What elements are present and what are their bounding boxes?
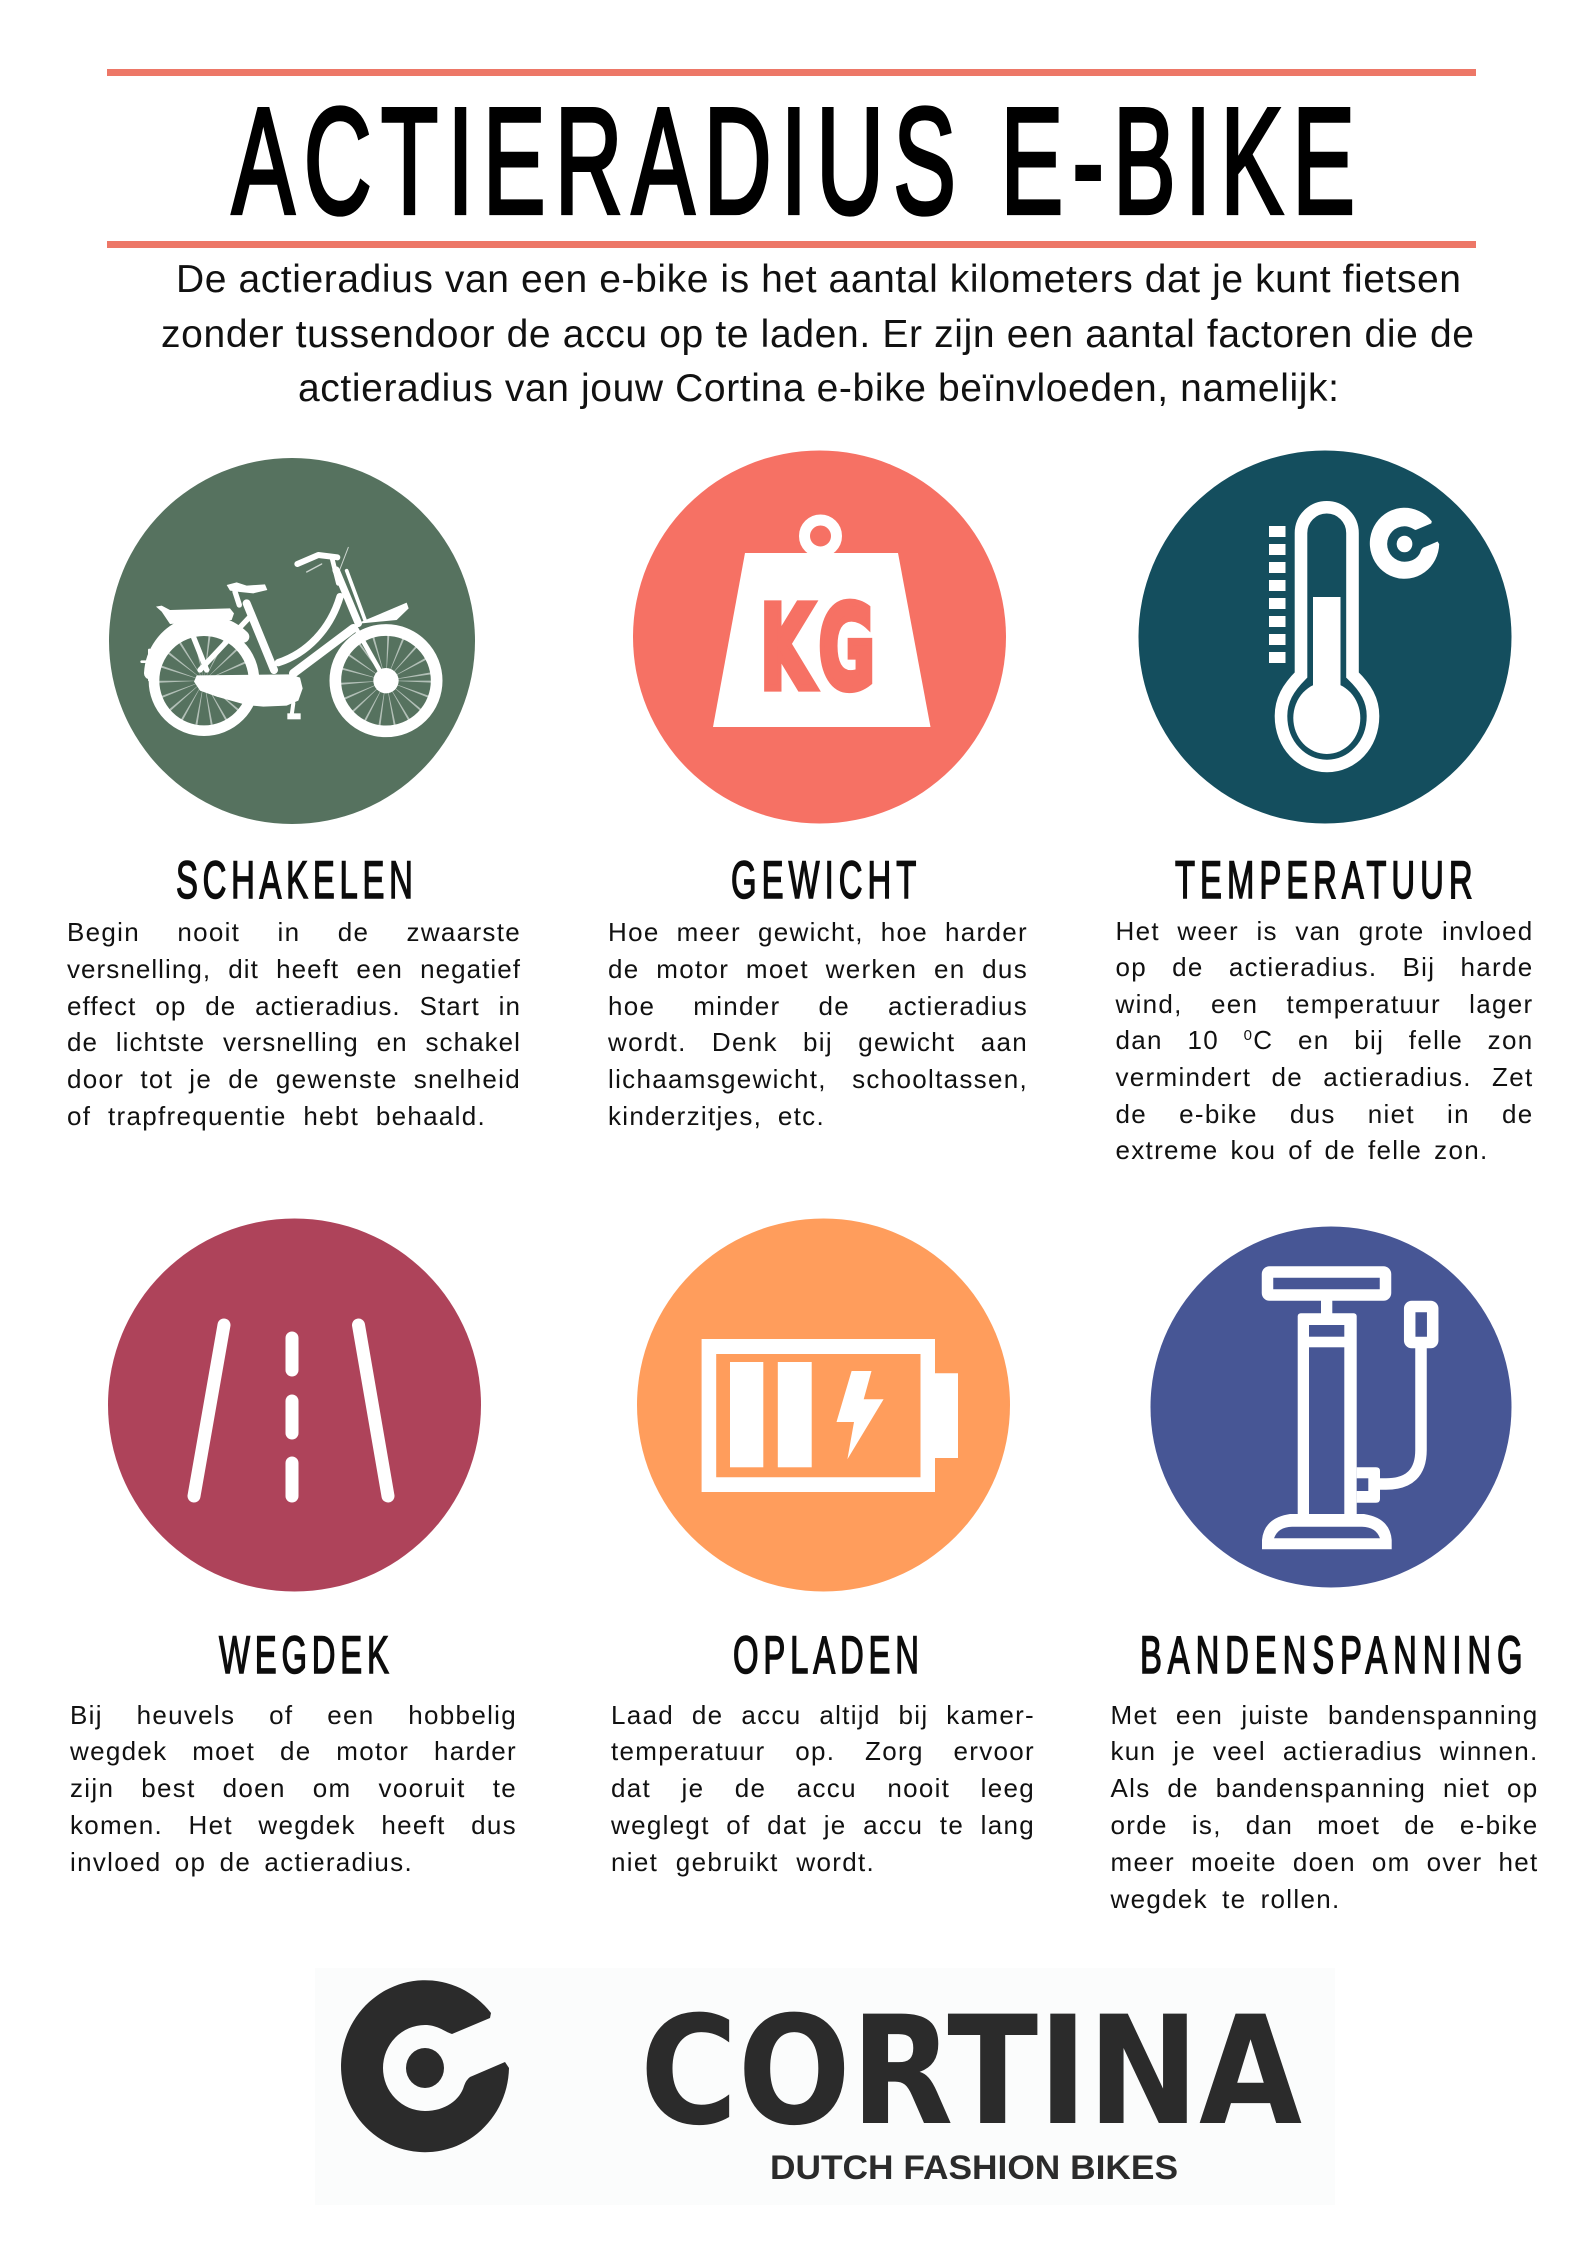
text: temperatuur: op de actieradius. Bij harde	[1116, 952, 1534, 982]
text: gewicht: kinderzitjes, etc.	[608, 1101, 825, 1131]
text: temperatuur: dan 10 0C en bij felle zon	[1116, 1025, 1534, 1055]
text: gewicht: Hoe meer gewicht, hoe harder	[608, 917, 1028, 947]
text: temperatuur: Het weer is van grote invloed	[1116, 916, 1534, 946]
title: ACTIERADIUS E-BIKE	[232, 76, 1355, 245]
text: bandenspanning: orde is, dan moet de e-bike	[1110, 1810, 1538, 1840]
heading: bandenspanning: BANDENSPANNING	[1140, 1626, 1523, 1685]
intro text: actieradius van jouw Cortina e-bike beïnvloeden, namelijk:	[298, 367, 1339, 410]
icon: road	[108, 1218, 481, 1592]
heading: temperatuur: TEMPERATUUR	[1175, 851, 1473, 910]
text: gewicht	[608, 917, 1028, 1131]
text: wegdek: zijn best doen om vooruit te	[70, 1773, 517, 1803]
text: schakelen: of trapfrequentie hebt behaald.	[67, 1101, 486, 1131]
panel: opladen	[611, 1218, 1035, 1877]
text: wegdek: Bij heuvels of een hobbelig	[70, 1700, 517, 1730]
icon: Cortina mark	[341, 1980, 509, 2152]
text: temperatuur	[1116, 916, 1534, 1165]
footer logo: Cortina	[341, 1980, 1302, 2187]
bottom title rule	[107, 241, 1476, 248]
text: schakelen: effect op de actieradius. Start in	[67, 991, 521, 1021]
text: opladen: Laad de accu altijd bij kamer-	[611, 1700, 1035, 1730]
tagline: DUTCH FASHION BIKES	[770, 2149, 1178, 2187]
panel: schakelen	[67, 458, 521, 1131]
panel: wegdek	[70, 1218, 517, 1877]
heading: gewicht: GEWICHT	[731, 851, 916, 910]
text: wegdek: invloed op de actieradius.	[70, 1847, 413, 1877]
text: schakelen	[67, 917, 521, 1131]
text: opladen: niet gebruikt wordt.	[611, 1847, 875, 1877]
text: bandenspanning: Als de bandenspanning niet op	[1110, 1773, 1538, 1803]
text: schakelen: versnelling, dit heeft een negatief	[67, 954, 521, 984]
top title rule	[107, 69, 1476, 76]
heading: opladen: OPLADEN	[733, 1626, 919, 1685]
text: temperatuur: vermindert de actieradius. Zet	[1116, 1062, 1534, 1092]
icon: thermometer	[1138, 450, 1512, 824]
text: temperatuur: extreme kou of de felle zon.	[1116, 1135, 1488, 1165]
heading: wegdek: WEGDEK	[219, 1626, 389, 1685]
heading: schakelen: SCHAKELEN	[176, 851, 413, 910]
text: opladen: dat je de accu nooit leeg	[611, 1773, 1035, 1803]
intro text: De actieradius van een e-bike is het aantal kilometers dat je kunt fietsen	[176, 258, 1461, 301]
text: wegdek	[70, 1700, 517, 1877]
text: bandenspanning: meer moeite doen om over het	[1110, 1847, 1538, 1877]
panel: bandenspanning	[1110, 1226, 1538, 1914]
text: wegdek: komen. Het wegdek heeft dus	[70, 1810, 517, 1840]
icon: bicycle	[109, 458, 475, 824]
intro text	[161, 258, 1474, 410]
text: gewicht: hoe minder de actieradius	[608, 991, 1028, 1021]
text: gewicht: de motor moet werken en dus	[608, 954, 1028, 984]
intro text: zonder tussendoor de accu op te laden. Er zijn een aantal factoren die de	[161, 313, 1474, 356]
text: schakelen: Begin nooit in de zwaarste	[67, 917, 521, 947]
icon: weight	[633, 450, 1006, 824]
text: gewicht: lichaamsgewicht, schooltassen,	[608, 1064, 1028, 1094]
icon: battery	[637, 1218, 1010, 1592]
text: wegdek: wegdek moet de motor harder	[70, 1736, 517, 1766]
text: schakelen: de lichtste versnelling en schakel	[67, 1027, 521, 1057]
label: KG: KG	[760, 582, 875, 716]
text: opladen: temperatuur op. Zorg ervoor	[611, 1736, 1035, 1766]
text: temperatuur: de e-bike dus niet in de	[1116, 1098, 1534, 1128]
text: bandenspanning: kun je veel actieradius winnen.	[1110, 1736, 1538, 1766]
text: bandenspanning: wegdek te rollen.	[1110, 1884, 1340, 1914]
text: gewicht: wordt. Denk bij gewicht aan	[608, 1027, 1028, 1057]
text: bandenspanning: Met een juiste bandenspanning	[1110, 1700, 1538, 1730]
text: opladen: weglegt of dat je accu te lang	[611, 1810, 1035, 1840]
text: schakelen: door tot je de gewenste snelheid	[67, 1064, 521, 1094]
text: opladen	[611, 1700, 1035, 1877]
text: temperatuur: wind, een temperatuur lager	[1116, 989, 1534, 1019]
text: bandenspanning	[1110, 1700, 1538, 1914]
panel: gewicht	[608, 450, 1028, 1131]
panel: temperatuur	[1116, 450, 1534, 1165]
icon: bicycle pump	[1150, 1226, 1512, 1588]
wordmark: CORTINA	[640, 1985, 1302, 2159]
